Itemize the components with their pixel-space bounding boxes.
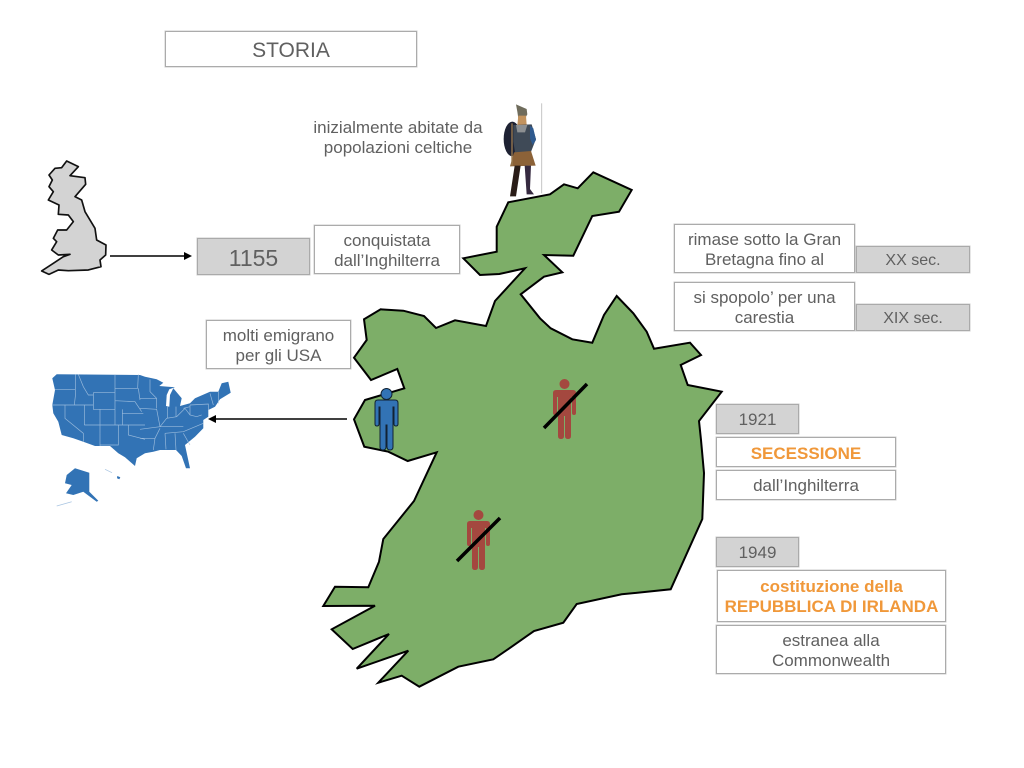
- arrow: Great Britain to 1155: [110, 252, 192, 260]
- text box: secession: SECESSIONE: [751, 444, 861, 462]
- text box: conquered by England: conquistata: [344, 230, 430, 250]
- text box: famine: carestia: [735, 308, 794, 326]
- text box: under Great Britain: rimase sotto la Gran: [688, 230, 841, 248]
- date box: 1949: 1949: [739, 542, 776, 562]
- text box: republic of Ireland: REPUBBLICA DI IRLANDA: [725, 597, 938, 616]
- icon: crossed-out red person, north: [544, 379, 587, 439]
- map: United States: [52, 374, 231, 506]
- text box: under Great Britain: Bretagna fino al: [705, 250, 824, 268]
- text box: conquered by England: [314, 225, 460, 274]
- icon: celtic warrior: [504, 103, 542, 196]
- text box: emigration: [206, 320, 351, 369]
- date box: 1949: [716, 537, 799, 567]
- date box: 1921: [716, 404, 799, 434]
- text box: emigration: molti emigrano: [223, 326, 334, 344]
- date box: XIX century: [856, 304, 970, 331]
- text box: famine: si spopolo’ per una: [693, 288, 836, 306]
- date box: XIX century: XIX sec.: [883, 310, 943, 326]
- arrow: Ireland to USA: [208, 415, 347, 423]
- date box: 1921: 1921: [739, 410, 776, 428]
- text box: secession: [716, 437, 896, 467]
- text box: emigration: per gli USA: [236, 346, 321, 364]
- text box: outside the Commonwealth: estranea alla: [782, 631, 880, 650]
- text box: from England: dall’Inghilterra: [753, 476, 859, 494]
- icon: crossed-out red person, south: [457, 510, 500, 570]
- title: [165, 31, 417, 67]
- text box: republic of Ireland: costituzione della: [760, 577, 903, 596]
- text box: conquered by England: dall’Inghilterra: [334, 250, 440, 270]
- text box: outside the Commonwealth: [716, 625, 946, 674]
- title: STORIA: [252, 38, 330, 62]
- text: celtic populations: popolazioni celtiche: [324, 138, 472, 157]
- text box: famine: [674, 282, 855, 331]
- date box: XX century: XX sec.: [885, 252, 941, 268]
- text box: under Great Britain: [674, 224, 855, 273]
- text box: outside the Commonwealth: Commonwealth: [772, 651, 890, 670]
- text: celtic populations: inizialmente abitate da: [313, 118, 483, 137]
- icon: blue person: [375, 388, 398, 450]
- date box: 1155: [197, 238, 310, 275]
- date box: XX century: [856, 246, 970, 273]
- date box: 1155: 1155: [229, 244, 278, 270]
- icon: Great Britain map: [42, 161, 106, 274]
- text box: republic of Ireland: [717, 570, 946, 622]
- map: Ireland: [323, 172, 722, 687]
- text: celtic populations: [313, 118, 483, 157]
- text box: from England: [716, 470, 896, 500]
